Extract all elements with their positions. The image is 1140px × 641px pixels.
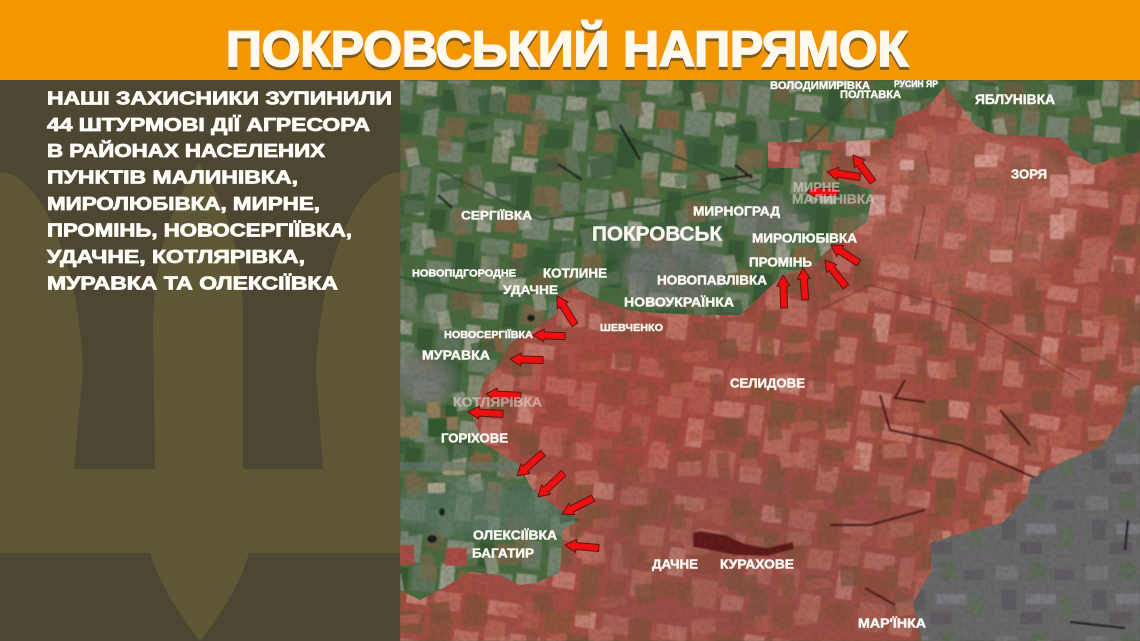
town labels: МАР'ЇНКА [858, 616, 926, 630]
town labels: ПОЛТАВКА [840, 89, 901, 101]
green fields terrain [390, 80, 1140, 641]
town labels: ПОКРОВСЬК [592, 224, 723, 246]
panel text block [47, 88, 392, 294]
semi-transparent labels over arrows: МАЛИНІВКА [792, 192, 875, 206]
town labels: ОЛЕКСІЇВКА [473, 528, 557, 542]
semi-transparent labels over arrows: МИРНЕ [793, 180, 840, 194]
pale fields north-east [846, 140, 870, 156]
town labels: ЯБЛУНІВКА [975, 92, 1055, 107]
town labels: ВОЛОДИМИРІВКА [770, 80, 870, 92]
orange title banner [0, 0, 1140, 80]
town labels: КУРАХОВЕ [720, 558, 794, 572]
red attack arrows [468, 151, 878, 554]
panel text block: ПРОМІНЬ, НОВОСЕРГІЇВКА, [47, 220, 352, 240]
reservoir [693, 531, 794, 556]
town labels: НОВОСЕРГІЇВКА [444, 328, 533, 341]
title: ПОКРОВСЬКИЙ НАПРЯМОК [226, 23, 908, 80]
town labels: МУРАВКА [422, 348, 491, 362]
texture overlay [400, 80, 1140, 641]
town labels: УДАЧНЕ [503, 285, 558, 297]
russian-occupied red zone [400, 80, 1140, 641]
panel text block: МУРАВКА ТА ОЛЕКСІЇВКА [47, 274, 338, 294]
town labels: ГОРІХОВЕ [441, 432, 508, 446]
semi-transparent labels over arrows: КОТЛЯРІВКА [453, 396, 542, 410]
panel text block: МИРОЛЮБІВКА, МИРНЕ, [47, 194, 320, 214]
satellite map [390, 80, 1140, 641]
town labels: ДАЧНЕ [652, 558, 698, 572]
town labels: СЕРГІЇВКА [461, 208, 532, 222]
grey zone near Donetsk [913, 385, 1140, 641]
trident emblem [0, 163, 400, 641]
panel text block: В РАЙОНАХ НАСЕЛЕНИХ [47, 140, 325, 161]
town labels: НОВОПАВЛІВКА [657, 274, 767, 288]
panel text block: НАШІ ЗАХИСНИКИ ЗУПИНИЛИ [47, 88, 392, 108]
town labels: МИРОЛЮБІВКА [752, 232, 857, 246]
town labels: РУСИН ЯР [894, 79, 938, 89]
left panel background [0, 80, 400, 641]
town labels: СЕЛИДОВЕ [730, 376, 805, 390]
town labels: КОТЛИНЕ [543, 266, 607, 280]
town labels: БАГАТИР [472, 546, 534, 560]
town labels: НОВОУКРАЇНКА [624, 294, 734, 310]
semi-transparent labels over arrows [453, 180, 875, 410]
town labels: НОВОПІДГОРОДНЕ [412, 268, 516, 280]
panel text block: ПУНКТІВ МАЛИНІВКА, [47, 168, 298, 188]
town labels [412, 79, 1055, 630]
town labels: ШЕВЧЕНКО [600, 322, 663, 334]
town labels: МИРНОГРАД [693, 204, 780, 218]
panel text block: 44 ШТУРМОВІ ДІЇ АГРЕСОРА [47, 115, 370, 135]
fields south-west [427, 402, 440, 418]
town labels: ПРОМІНЬ [749, 256, 812, 270]
town labels: ЗОРЯ [1011, 166, 1047, 182]
panel text block: УДАЧНЕ, КОТЛЯРІВКА, [47, 247, 305, 267]
title: ПОКРОВСЬКИЙ НАПРЯМОК [226, 20, 908, 77]
small red pockets [400, 545, 467, 566]
